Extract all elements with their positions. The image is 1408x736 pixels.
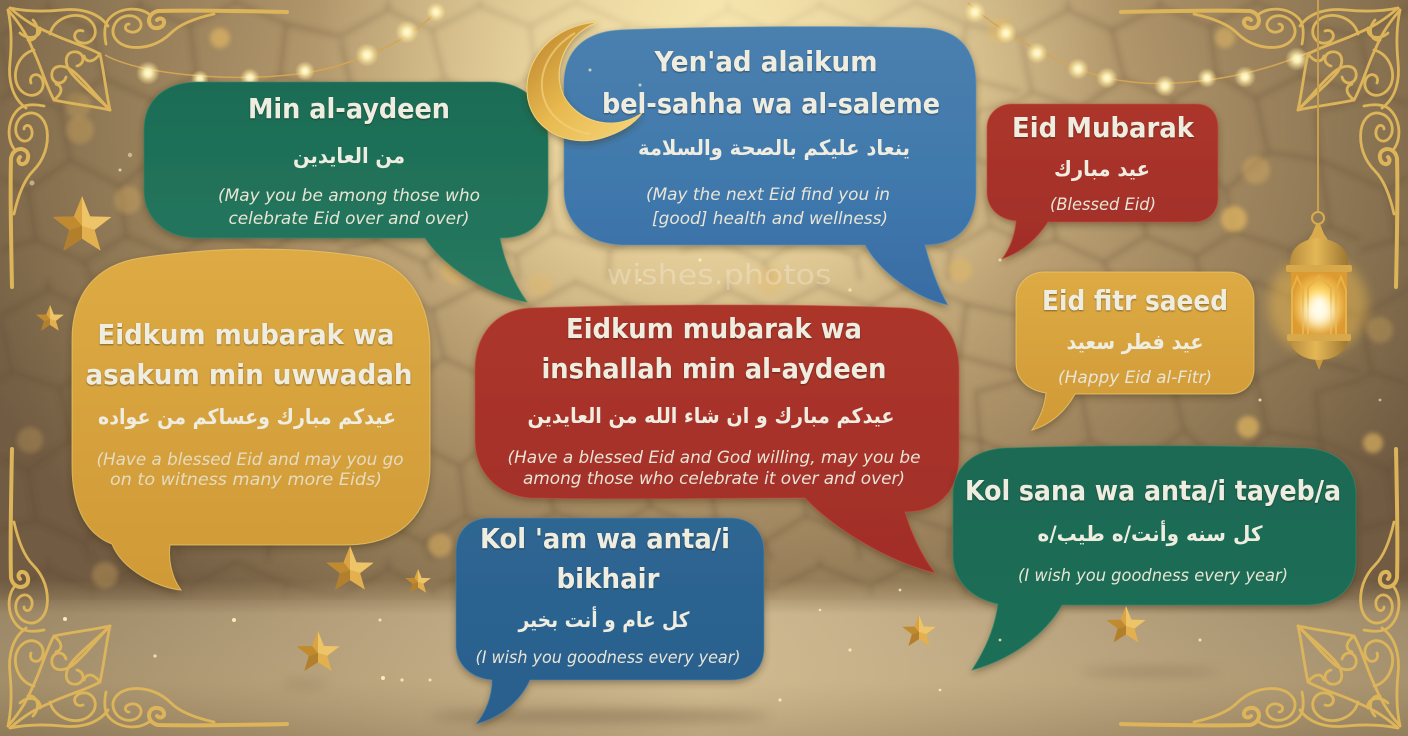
watermark: wishes.photos bbox=[606, 258, 832, 291]
speech bubble shape bbox=[1016, 272, 1254, 430]
bubble: Yen'ad alaikum bbox=[564, 27, 976, 305]
phrase: Eidkum mubarak wa bbox=[98, 318, 394, 351]
arabic phrase: ينعاد عليكم بالصحة والسلامة bbox=[638, 136, 910, 160]
arabic phrase: عيد فطر سعيد bbox=[1066, 330, 1204, 354]
speech bubble shape bbox=[987, 104, 1218, 259]
translation: (Blessed Eid) bbox=[1050, 195, 1156, 215]
translation: (May you be among those who bbox=[218, 186, 480, 206]
arabic phrase: من العايدين bbox=[293, 144, 405, 168]
translation: (I wish you goodness every year) bbox=[1018, 566, 1288, 586]
phrase line 2: bel-sahha wa al-saleme bbox=[602, 87, 940, 120]
bubble: Kol sana wa anta/i tayeb/a bbox=[953, 446, 1356, 670]
translation line 2: celebrate Eid over and over) bbox=[228, 209, 470, 229]
floor bbox=[0, 580, 1408, 736]
phrase line 2: inshallah min al-aydeen bbox=[542, 352, 886, 385]
bokeh lights bbox=[17, 18, 1393, 588]
translation line 2: on to witness many more Eids) bbox=[110, 470, 382, 490]
translation line 2: among those who celebrate it over and over) bbox=[523, 469, 905, 489]
phrase: Eid fitr saeed bbox=[1042, 284, 1228, 317]
phrase: Kol 'am wa anta/i bbox=[480, 522, 730, 555]
translation: (I wish you goodness every year) bbox=[476, 648, 740, 668]
translation: (Have a blessed Eid and may you go bbox=[96, 450, 403, 470]
icon: gold star bbox=[405, 569, 431, 593]
phrase: Eid Mubarak bbox=[1012, 111, 1195, 144]
speech bubble shape bbox=[456, 518, 764, 724]
phrase: Min al-aydeen bbox=[248, 92, 450, 125]
speech bubble shape bbox=[564, 27, 976, 305]
icon: hanging lantern bbox=[1268, 0, 1368, 370]
arabic phrase: كل عام و أنت بخير bbox=[518, 605, 690, 632]
bubble: Eid fitr saeed bbox=[1016, 272, 1254, 430]
corner ornament: bottom right bbox=[1121, 449, 1400, 728]
icon: gold star bbox=[1106, 606, 1146, 642]
corner ornament: bottom left bbox=[8, 449, 287, 728]
bubble: Eidkum mubarak wa asakum bbox=[72, 249, 430, 590]
icon: gold star bbox=[902, 615, 936, 646]
icon: gold star bbox=[53, 196, 111, 251]
icon: gold star bbox=[36, 305, 64, 330]
bubble: Kol 'am wa anta/i bbox=[456, 518, 764, 724]
translation: (May the next Eid find you in bbox=[646, 185, 890, 205]
bubble: Eidkum mubarak wa inshallah bbox=[475, 305, 959, 573]
icon: gold star bbox=[296, 631, 340, 671]
floor shadows bbox=[281, 669, 1220, 722]
speech bubble shape bbox=[953, 446, 1356, 670]
corner ornament: top left bbox=[8, 8, 287, 287]
speech bubble shape bbox=[144, 82, 548, 302]
bubble: Min al-aydeen bbox=[144, 82, 548, 302]
arabic phrase: عيد مبارك bbox=[1054, 157, 1150, 181]
phrase line 2: asakum min uwwadah bbox=[86, 358, 412, 391]
string lights left bbox=[105, 2, 446, 88]
phrase: Eidkum mubarak wa bbox=[566, 312, 862, 345]
corner ornament: top right bbox=[1121, 8, 1400, 287]
arabic phrase: عيدكم مبارك وعساكم من عواده bbox=[98, 405, 396, 429]
phrase line 2: bikhair bbox=[556, 562, 660, 595]
arabic phrase: كل سنه وأنت/ه طيب/ه bbox=[1038, 519, 1263, 546]
arabic phrase: عيدكم مبارك و ان شاء الله من العايدين bbox=[528, 404, 894, 428]
icon: gold star bbox=[326, 546, 374, 590]
phrase: Kol sana wa anta/i tayeb/a bbox=[965, 474, 1341, 507]
translation: (Happy Eid al-Fitr) bbox=[1058, 368, 1212, 388]
bubble: Eid Mubarak bbox=[987, 104, 1218, 259]
speech bubble shape bbox=[72, 249, 430, 590]
speech bubble shape bbox=[475, 305, 959, 573]
translation: (Have a blessed Eid and God willing, may you be bbox=[508, 448, 920, 468]
phrase: Yen'ad alaikum bbox=[653, 45, 878, 78]
string lights right bbox=[964, 1, 1310, 97]
translation line 2: [good] health and wellness) bbox=[652, 209, 888, 229]
icon: crescent moon bbox=[527, 22, 642, 141]
